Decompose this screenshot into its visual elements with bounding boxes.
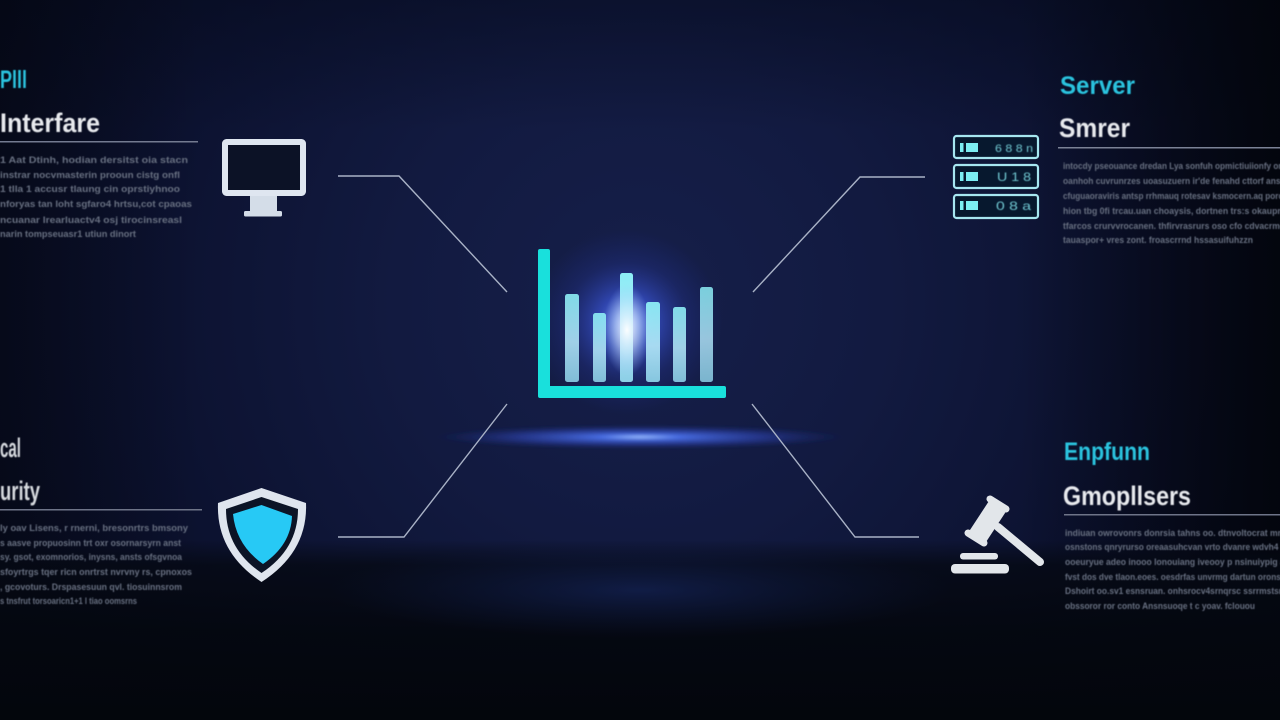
- central bar chart icon: [532, 230, 726, 414]
- icon: server rack: 6 8 8 n: [995, 143, 1033, 155]
- heading accent: Enpfunn: [1064, 438, 1150, 466]
- floor glow: [435, 425, 845, 449]
- body text: [0, 523, 192, 606]
- body text: s aasve propuosinn trt oxr osornarsyrn anst: [0, 538, 181, 548]
- body text: , gcovoturs. Drspasesuun qvl. tiosuinnsrom: [0, 582, 182, 592]
- heading: Gmopllsers: [1063, 481, 1191, 511]
- heading: Smrer: [1059, 113, 1130, 143]
- body text: narin tompseuasr1 utiun dinort: [0, 229, 136, 239]
- heading: urity: [0, 476, 40, 506]
- icon: server rack: 0 8 a: [996, 199, 1031, 213]
- body text: 1 tlla 1 accusr tlaung cin oprstiyhnoo: [0, 184, 181, 194]
- icon: shield: [218, 488, 306, 582]
- body text: [1065, 528, 1280, 611]
- heading accent: Server: [1060, 72, 1135, 100]
- icon: monitor: [225, 142, 303, 216]
- connector: top left: [338, 176, 507, 292]
- body text: tauaspor+ vres zont. froascrrnd hssasuifuhzzn: [1063, 235, 1253, 245]
- panel: top right, server: [1058, 72, 1280, 245]
- icon: server rack: U 1 8: [997, 170, 1031, 184]
- body text: 1 Aat Dtinh, hodian dersitst oia stacn: [0, 155, 188, 165]
- body text: sfoyrtrgs tqer ricn onrtrst nvrvny rs, cpnoxos: [0, 567, 192, 577]
- panel: top left, interface: [0, 66, 198, 239]
- body text: [0, 155, 192, 239]
- icon: server rack: [954, 136, 1038, 218]
- connector: bottom right: [752, 404, 919, 537]
- body text: ncuanar lrearluactv4 osj tirocinsreasl: [0, 215, 182, 225]
- connector: top right: [753, 177, 925, 292]
- body text: instrar nocvmasterin prooun cistg onfl: [0, 170, 180, 180]
- heading: Interfare: [0, 108, 100, 138]
- icon: gavel: [951, 499, 1040, 574]
- panel: bottom left, security: [0, 433, 202, 606]
- body text: s tnsfrut torsoaricn1+1 l tiao oomsrns: [0, 596, 137, 606]
- connector: bottom left: [338, 404, 507, 537]
- body text: sy. gsot, exomnorios, inysns, ansts ofsgvnoa: [0, 552, 183, 562]
- body text: nforyas tan loht sgfaro4 hrtsu,cot cpaoas: [0, 199, 192, 209]
- panel: bottom right, compliance: [1063, 438, 1280, 611]
- body text: obssoror ror conto Ansnsuoqe t c yoav. fclouou: [1065, 601, 1255, 611]
- body text: ly oav Lisens, r rnerni, bresonrtrs bmsony: [0, 523, 188, 533]
- heading accent: Plll: [0, 66, 27, 94]
- heading accent: cal: [0, 433, 21, 463]
- body text: [1063, 161, 1280, 245]
